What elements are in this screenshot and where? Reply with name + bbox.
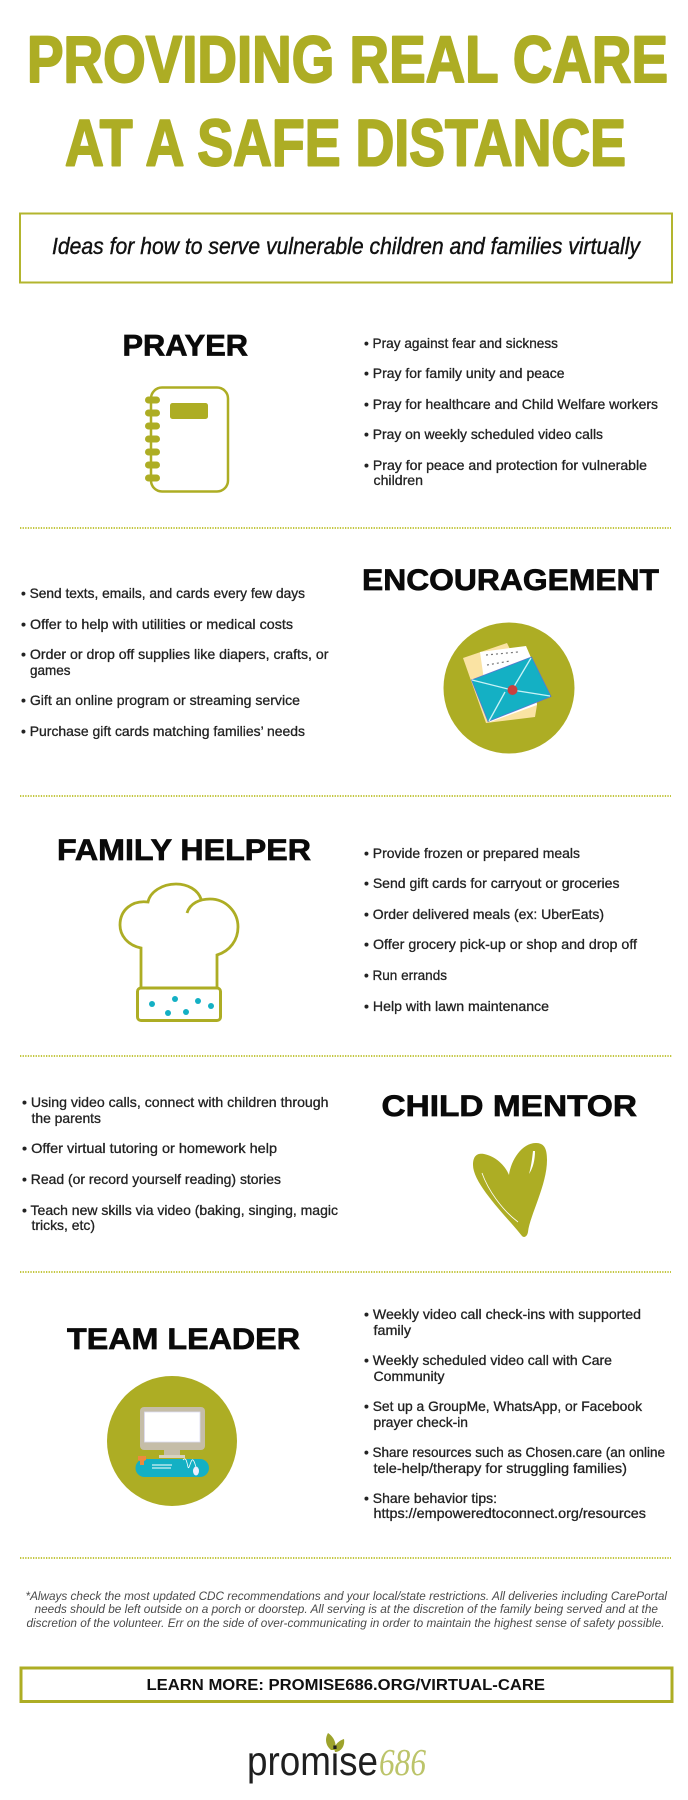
icon: leaves [326,1733,344,1752]
list: team leader ideas: Community [374,1368,444,1384]
list: child mentor ideas: the parents [32,1110,101,1126]
list: encouragement ideas: • Order or drop off supplies like diapers, crafts, or [21,646,329,662]
list: team leader ideas: • Weekly video call check-ins with supported [364,1306,641,1322]
footnote [26,1591,667,1630]
list: team leader ideas: family [374,1322,411,1338]
panel: encouragement [21,564,659,754]
list: team leader ideas: • Weekly scheduled video call with Care [364,1352,612,1368]
list: child mentor ideas: • Read (or record yourself reading) stories [22,1171,281,1187]
list: child mentor ideas [22,1094,338,1233]
list: encouragement ideas: • Send texts, emails, and cards every few days [21,585,305,601]
list: encouragement ideas: • Purchase gift cards matching families’ needs [21,723,305,739]
list: team leader ideas: • Share resources such as Chosen.care (an online [364,1444,665,1460]
subtitle box: Ideas for how to serve vulnerable children and families virtually [52,233,641,259]
list: prayer ideas: • Pray on weekly scheduled video calls [364,426,603,442]
list: family helper ideas: • Send gift cards for carryout or groceries [364,875,620,891]
list: team leader ideas: https://empoweredtoconnect.org/resources [374,1505,646,1521]
list: prayer ideas: • Pray for peace and protection for vulnerable [364,457,647,473]
list: encouragement ideas [21,585,329,739]
list: team leader ideas: prayer check-in [374,1414,468,1430]
list: team leader ideas: • Share behavior tips: [364,1490,497,1506]
list: family helper ideas: • Offer grocery pick-up or shop and drop off [364,936,637,952]
icon: heart [473,1143,547,1237]
list: encouragement ideas: • Gift an online program or streaming service [21,692,300,708]
list: child mentor ideas: • Offer virtual tutoring or homework help [22,1140,277,1156]
panel: prayer [122,330,658,492]
list: family helper ideas: • Provide frozen or prepared meals [364,845,580,861]
list: team leader ideas: • Set up a GroupMe, WhatsApp, or Facebook [364,1398,643,1414]
list: encouragement ideas: games [30,662,70,678]
list: prayer ideas: • Pray for healthcare and Child Welfare workers [364,396,658,412]
list: prayer ideas: children [374,472,423,488]
list: encouragement ideas: • Offer to help with utilities or medical costs [21,616,293,632]
heading: team leader: TEAM LEADER [67,1323,300,1356]
list: child mentor ideas: • Teach new skills via video (baking, singing, magic [22,1202,338,1218]
heading: encouragement: ENCOURAGEMENT [362,564,659,597]
list: prayer ideas [364,335,658,488]
icon: envelope in circle [444,622,574,754]
list: child mentor ideas: • Using video calls, connect with children through [22,1094,328,1110]
icon: computer in circle [107,1376,237,1506]
title [27,22,668,180]
heading: prayer: PRAYER [122,330,248,362]
logo: promise686: promise [247,1738,378,1784]
list: family helper ideas: • Order delivered meals (ex: UberEats) [364,906,604,922]
panel: team leader [67,1306,665,1521]
list: team leader ideas [364,1306,665,1521]
heading: family helper: FAMILY HELPER [57,834,311,867]
icon: chef hat [120,884,238,1020]
logo: promise686: 686 [379,1742,426,1784]
icon: notebook [145,388,228,492]
list: prayer ideas: • Pray for family unity and peace [364,365,565,381]
learn more box: LEARN MORE: PROMISE686.ORG/VIRTUAL-CARE [146,1677,545,1694]
panel: child mentor [22,1090,637,1237]
subtitle box [20,214,672,282]
list: family helper ideas: • Help with lawn maintenance [364,998,549,1014]
footnote: *Always check the most updated CDC recommendations and your local/state restrictions. All deliveries including CarePortal [26,1591,667,1603]
panel: family helper [57,834,637,1020]
list: family helper ideas [364,845,637,1014]
heading: child mentor: CHILD MENTOR [382,1090,637,1123]
list: child mentor ideas: tricks, etc) [32,1217,95,1233]
footnote: needs should be left outside on a porch or doorstep. All serving is at the discretion of the family being served and at the [34,1604,658,1616]
list: prayer ideas: • Pray against fear and sickness [364,335,558,351]
footnote: discretion of the volunteer. Err on the side of over-communicating in order to maintain the highest sense of safety possible. [26,1618,664,1630]
list: team leader ideas: tele-help/therapy for struggling families) [374,1460,627,1476]
learn more box [21,1668,672,1702]
list: family helper ideas: • Run errands [364,967,447,983]
